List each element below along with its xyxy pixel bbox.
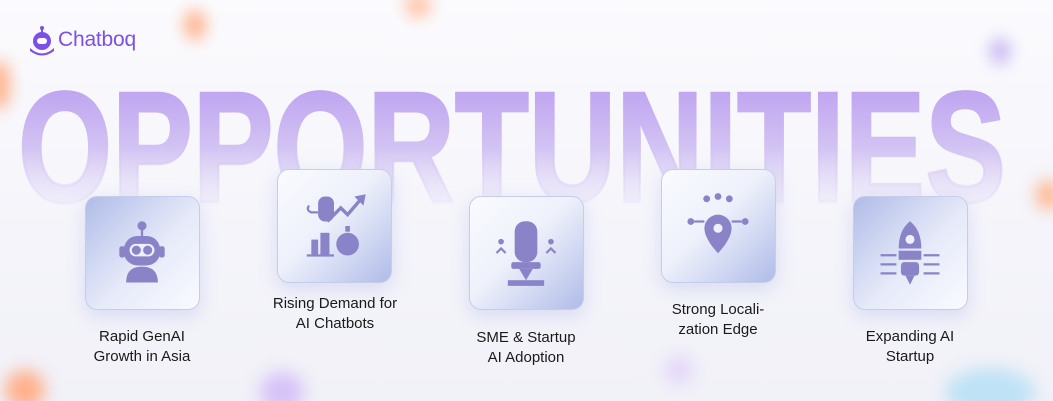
label 3: AI Adoption — [488, 348, 564, 366]
label 4: zation Edge — [678, 320, 758, 338]
label 4: Strong Locali- — [672, 301, 764, 318]
label 2 — [273, 295, 397, 332]
card 2 — [277, 169, 392, 283]
card 5 — [853, 196, 968, 310]
label 5: Startup — [886, 348, 934, 364]
label 3: SME & Startup — [476, 329, 576, 346]
label 1: Rapid GenAI — [99, 328, 185, 345]
card 1 — [85, 196, 200, 310]
label 1 — [94, 328, 190, 364]
card 4 — [661, 169, 776, 283]
label 4 — [672, 301, 764, 338]
label 1: Growth in Asia — [94, 348, 190, 364]
logo: Chatboq — [58, 28, 136, 51]
label 3 — [476, 329, 576, 366]
label 2: Rising Demand for — [273, 295, 397, 312]
label 2: AI Chatbots — [296, 314, 374, 332]
label 5 — [866, 328, 954, 364]
logo — [30, 26, 136, 56]
label 5: Expanding AI — [866, 328, 954, 345]
card 3 — [469, 196, 584, 310]
